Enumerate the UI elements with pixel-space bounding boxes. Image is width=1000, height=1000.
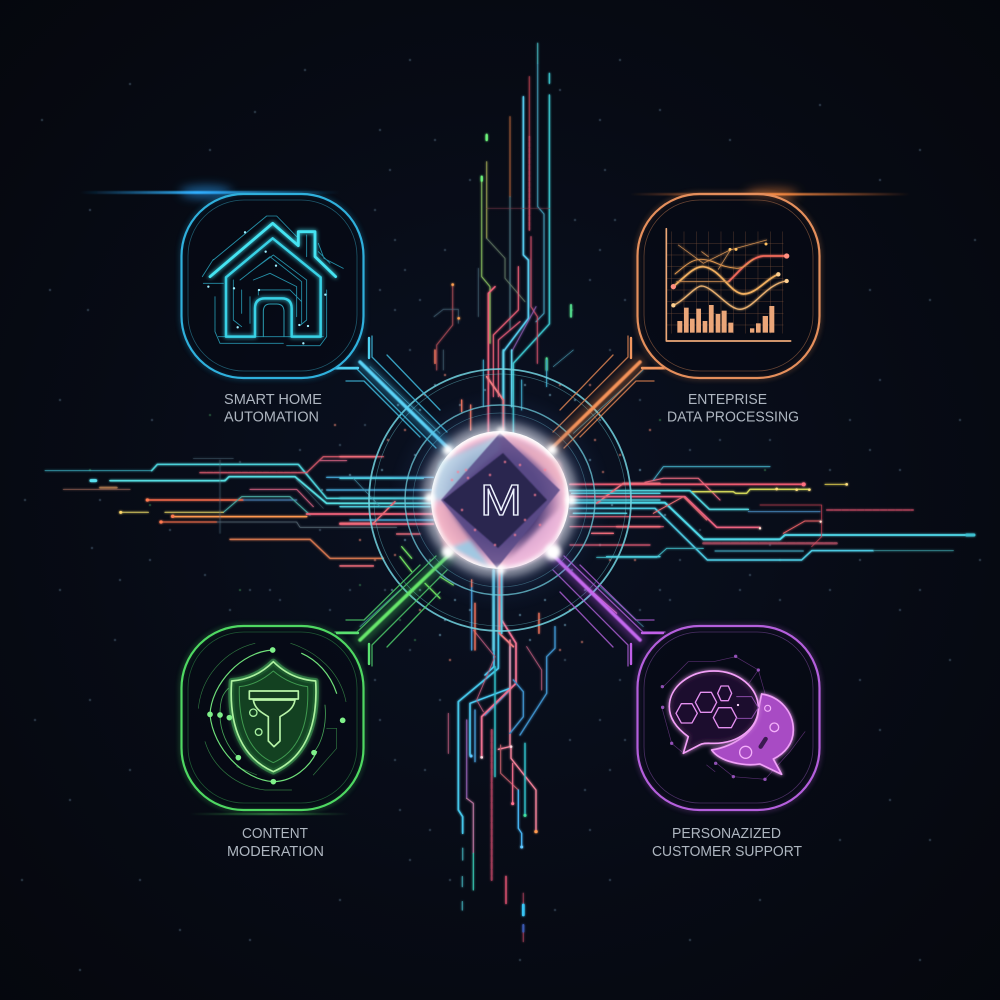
- panel: smart home automation: [182, 194, 364, 426]
- corner light flares: [80, 186, 910, 815]
- label: [227, 825, 324, 860]
- horizontal circuit traces: left: [45, 457, 433, 558]
- panel: content moderation: [182, 626, 364, 860]
- chart lines: [673, 240, 787, 309]
- label: MODERATION: [227, 843, 324, 860]
- panel: personalized customer support: [638, 626, 820, 860]
- central hub sphere: [388, 388, 612, 612]
- panel: enterprise data processing: [638, 194, 820, 426]
- sphere sparks: [452, 462, 545, 545]
- chart bars: [677, 305, 774, 333]
- sphere facets: [431, 435, 566, 570]
- hub rings: [369, 369, 631, 631]
- label: CONTENT: [242, 825, 308, 842]
- connector: orange: [550, 336, 665, 450]
- funnel: [249, 691, 298, 747]
- icon: shield filter: [198, 643, 346, 790]
- sphere bright nodes: [425, 427, 576, 574]
- logo letter M: M: [480, 476, 522, 525]
- connector: purple: [550, 552, 665, 666]
- label: DATA PROCESSING: [667, 408, 799, 426]
- hexagons: [676, 686, 737, 728]
- central trace bundle: [340, 350, 660, 650]
- label: [667, 391, 799, 426]
- chart axes: [666, 229, 791, 341]
- sphere mid diamond: [441, 433, 560, 568]
- chart grid: [667, 232, 783, 333]
- label: [652, 825, 802, 860]
- sphere dark diamond: [443, 453, 547, 548]
- orbit arcs: [198, 643, 346, 790]
- label: CUSTOMER SUPPORT: [652, 843, 802, 860]
- left bubble: [669, 671, 758, 753]
- horizontal circuit traces: right: [570, 467, 974, 560]
- shield: [231, 662, 316, 772]
- vertical circuit traces: top: [434, 43, 571, 440]
- connector: blue: [335, 336, 452, 452]
- icon: circuit house: [202, 216, 343, 346]
- label: PERSONAZIZED: [672, 825, 781, 842]
- icon: chat bubbles: [662, 656, 805, 779]
- label: [224, 391, 322, 426]
- label: SMART HOME: [224, 391, 322, 408]
- label: AUTOMATION: [224, 408, 319, 426]
- label: ENTEPRISE: [688, 391, 767, 408]
- right bubble: [712, 694, 793, 774]
- hexagon network: [662, 657, 805, 779]
- vertical circuit traces: bottom: [448, 570, 555, 942]
- connector: green: [335, 552, 452, 666]
- icon: data chart: [666, 229, 791, 341]
